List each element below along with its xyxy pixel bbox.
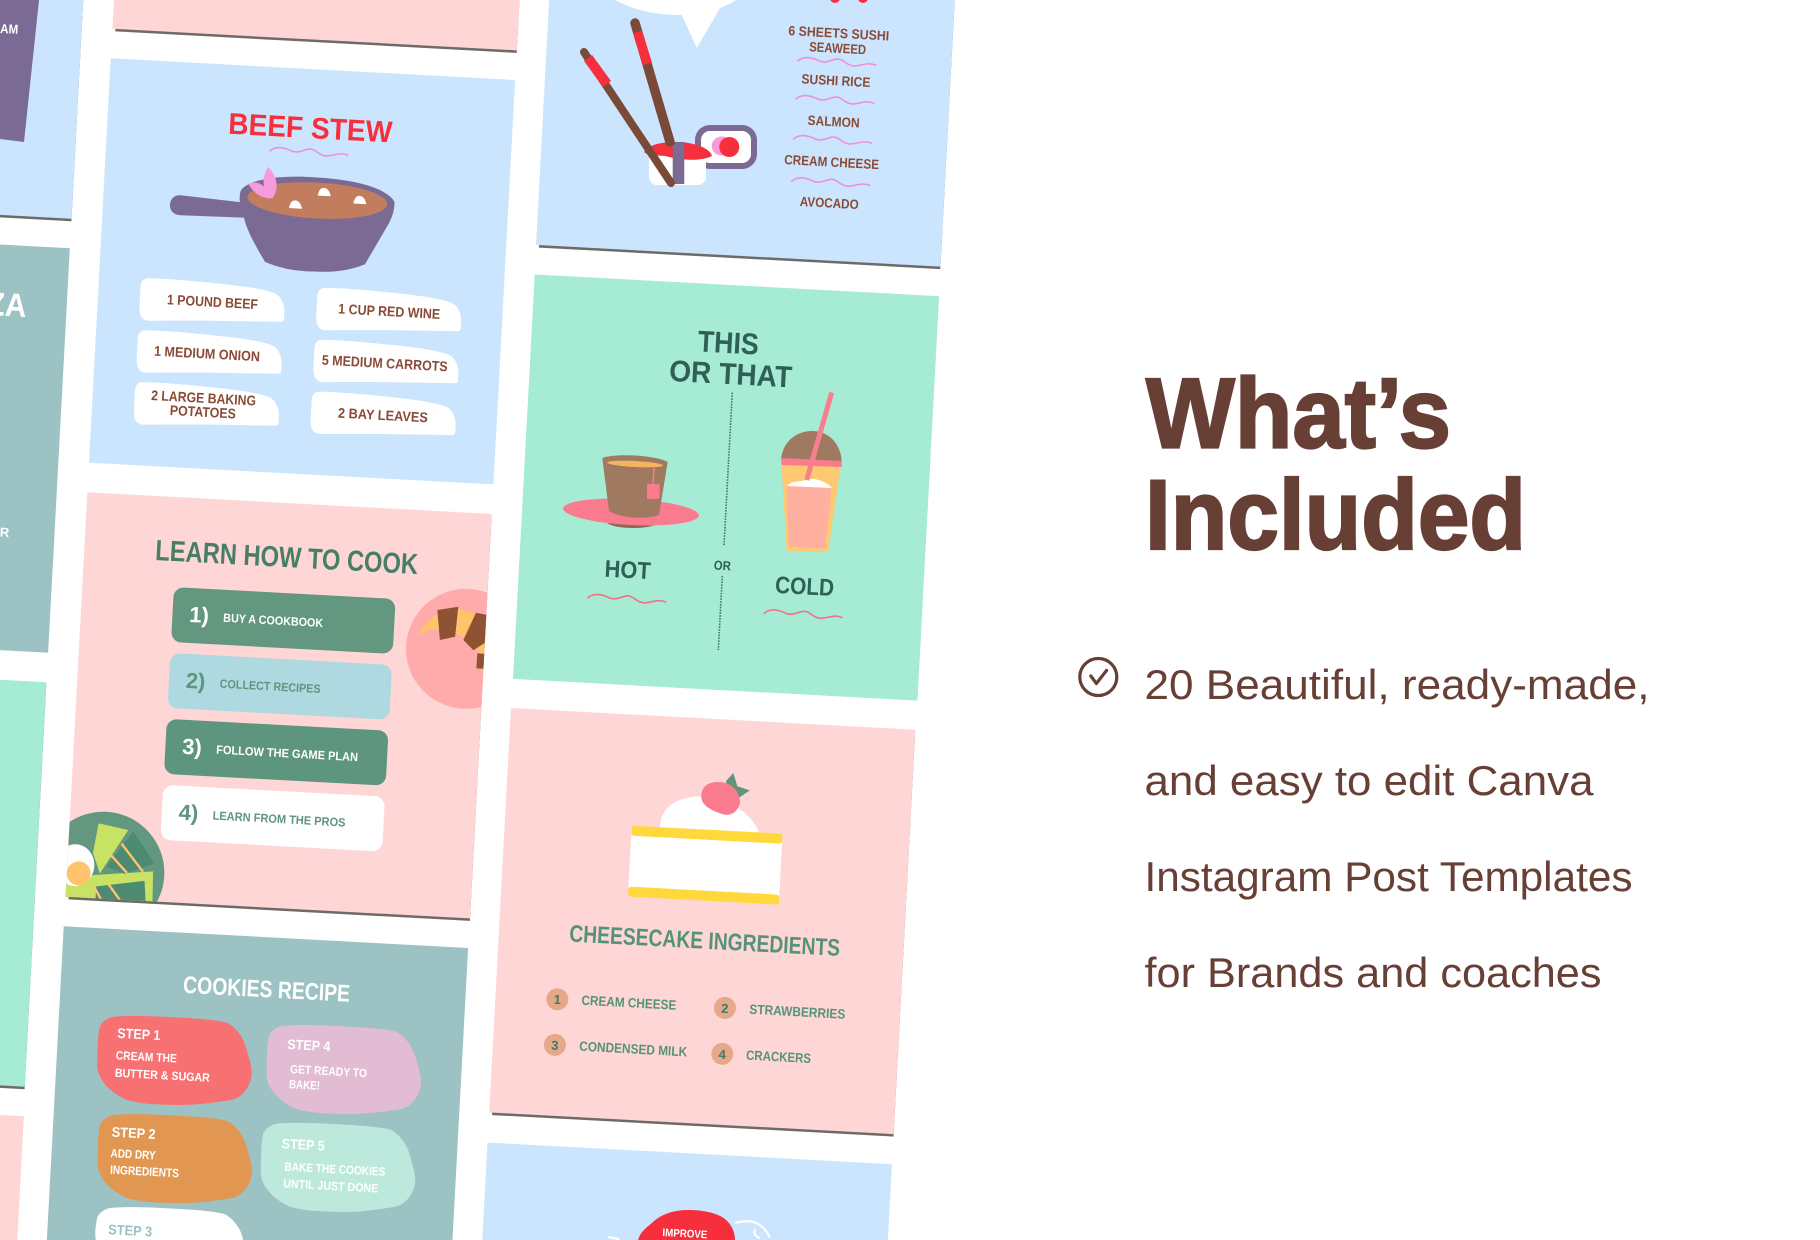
step 5 blob: STEP 5 — [281, 1135, 325, 1154]
step 1 blob: CREAM THE — [115, 1048, 177, 1066]
step 1: BUY A COOKBOOK — [223, 611, 324, 630]
ingredient list: SUSHI RICE — [801, 71, 871, 90]
step 3 blob — [95, 1204, 245, 1240]
panel: sushi card — [536, 0, 962, 269]
red blob — [638, 1207, 737, 1240]
label: hot: HOT — [604, 556, 652, 585]
text block: description: 20 Beautiful, ready-made, — [1144, 661, 1650, 708]
text block: description: for Brands and coaches — [1144, 949, 1602, 996]
step 4 blob: STEP 4 — [287, 1036, 331, 1054]
step 2 blob: INGREDIENTS — [110, 1163, 179, 1180]
ingredient: 1 medium onion — [136, 330, 283, 380]
panel: improve card — [482, 1142, 892, 1240]
step 2 — [167, 653, 392, 720]
step 1 blob — [95, 1013, 255, 1109]
ingredient: 2 bay leaves: 2 BAY LEAVES — [338, 405, 428, 425]
step 3 blob: STEP 3 — [108, 1221, 153, 1239]
item: cream cheese: 1 — [553, 992, 561, 1007]
icon: cooking pot — [167, 162, 396, 276]
text block: description: Instagram Post Templates — [1144, 853, 1632, 900]
step 1 blob: STEP 1 — [117, 1025, 161, 1043]
step 2 blob: STEP 2 — [111, 1124, 156, 1142]
step 4 blob: BAKE! — [289, 1077, 320, 1093]
ingredient: 2 large baking potatoes: 2 LARGE BAKING — [151, 387, 257, 409]
panel: bottom-left pink card — [0, 1115, 24, 1240]
step 2 blob: ADD DRY — [110, 1146, 156, 1163]
decorative red dots — [830, 0, 868, 3]
heading: cookies recipe: COOKIES RECIPE — [182, 972, 351, 1008]
ingredient list — [779, 23, 890, 213]
item: condensed milk: 3 — [551, 1038, 559, 1053]
item: strawberries — [713, 996, 846, 1025]
ingredient: 1 medium onion: 1 MEDIUM ONION — [154, 343, 260, 364]
ingredient list: SALMON — [807, 113, 860, 131]
icon: tea cup — [562, 455, 700, 529]
heading: learn how to cook: LEARN HOW TO COOK — [154, 535, 419, 581]
ingredient: 1 cup red wine: 1 CUP RED WINE — [338, 300, 441, 322]
ingredient: 5 medium carrots: 5 MEDIUM CARROTS — [321, 352, 448, 374]
step 2 blob — [95, 1111, 255, 1207]
panel: cheesecake ingredients card — [489, 708, 915, 1137]
item: crackers — [711, 1042, 812, 1070]
icon: cheesecake slice — [628, 768, 786, 905]
icon: iced drink — [781, 393, 842, 552]
step 4: 4) — [178, 800, 199, 826]
step 2: 2) — [185, 668, 206, 694]
item: cream cheese: CREAM CHEESE — [581, 993, 677, 1013]
heading: this or that — [668, 324, 795, 394]
step 4: LEARN FROM THE PROS — [212, 808, 346, 830]
ingredient list: 6 SHEETS SUSHI — [788, 23, 890, 44]
panel: this or that card — [513, 274, 939, 701]
step 2: COLLECT RECIPES — [219, 677, 321, 696]
panel: mint card — [0, 661, 46, 1089]
icon: croissant plate — [406, 588, 488, 709]
item: crackers: 4 — [718, 1047, 727, 1062]
speech bubble — [583, 0, 760, 51]
ingredient list: CREAM CHEESE — [784, 152, 880, 172]
step 3 — [164, 719, 389, 786]
panel: top pink card — [112, 0, 539, 53]
item: crackers: CRACKERS — [746, 1048, 811, 1066]
heading: what's included: What’s — [1146, 358, 1451, 468]
ingredient: 1 pound beef: 1 POUND BEEF — [167, 291, 259, 312]
panel: beef stew card — [89, 58, 515, 484]
heading: what's included: Included — [1145, 459, 1526, 570]
step 3: FOLLOW THE GAME PLAN — [216, 743, 358, 764]
panel: cookies recipe card — [47, 926, 468, 1240]
step 1 blob: BUTTER & SUGAR — [115, 1066, 210, 1085]
white scribbles — [608, 1214, 771, 1240]
label: or: OR — [713, 558, 732, 573]
item: condensed milk: CONDENSED MILK — [579, 1039, 688, 1059]
panel: top-left blue card: AM — [0, 21, 19, 37]
ingredient list: SEAWEED — [809, 39, 867, 57]
step 5 blob: BAKE THE COOKIES — [284, 1159, 386, 1179]
heading: this or that: OR THAT — [668, 355, 793, 394]
step 4 blob — [264, 1022, 424, 1118]
item: condensed milk — [543, 1033, 688, 1063]
ingredient: 2 large baking potatoes — [133, 382, 280, 432]
ingredient: 1 cup red wine — [315, 287, 463, 337]
text block: description: and easy to edit Canva — [1144, 757, 1594, 804]
squiggle underline — [270, 147, 348, 157]
icon: salad plate — [66, 812, 164, 902]
panel: teal pizza card — [0, 227, 70, 653]
ingredient: 5 medium carrots — [313, 339, 460, 389]
heading: this or that: THIS — [697, 325, 760, 362]
divider line — [718, 393, 732, 650]
label: cold: COLD — [774, 572, 835, 602]
icon: check circle — [1080, 658, 1117, 696]
step 4 — [160, 785, 385, 852]
item: cream cheese — [546, 988, 677, 1017]
ingredient list: AVOCADO — [799, 194, 859, 212]
panel: top-left blue card — [0, 0, 93, 221]
step 4 blob: GET READY TO — [290, 1062, 367, 1080]
step 5 blob — [258, 1120, 418, 1216]
ingredient: 1 pound beef — [139, 278, 286, 328]
icon: sushi roll — [698, 128, 754, 166]
icon: nigiri and chopsticks — [584, 23, 712, 185]
label: cold — [764, 571, 844, 619]
ingredient: 2 large baking potatoes: POTATOES — [170, 402, 236, 422]
item: strawberries: 2 — [721, 1001, 729, 1016]
heading: what's included — [1145, 358, 1526, 570]
text block: description — [1144, 661, 1650, 996]
panel: learn how to cook card — [66, 492, 492, 921]
illustrations clipped to card — [66, 588, 488, 902]
heading: beef stew: BEEF STEW — [227, 108, 394, 149]
label: hot — [588, 555, 668, 604]
step 1: 1) — [189, 602, 210, 628]
item: strawberries: STRAWBERRIES — [749, 1002, 846, 1022]
heading: cheesecake ingredients: CHEESECAKE INGREDIENTS — [569, 920, 841, 962]
ingredient: 2 bay leaves — [310, 391, 457, 441]
step 1 — [171, 587, 396, 654]
step 5 blob: UNTIL JUST DONE — [283, 1176, 379, 1196]
step 3: 3) — [182, 734, 203, 760]
